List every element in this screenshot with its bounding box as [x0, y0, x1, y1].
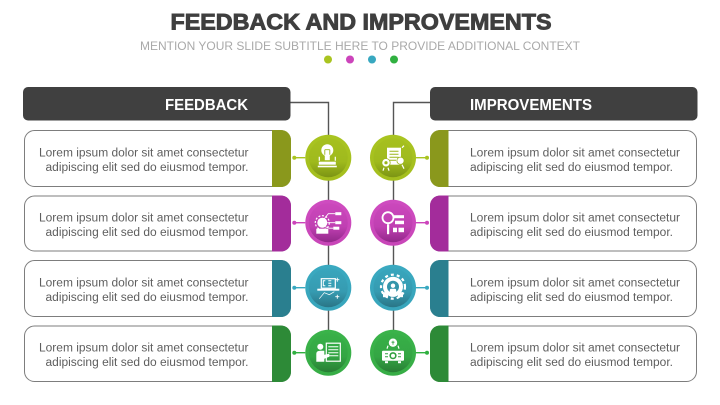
panel: feedback row 3: [24, 260, 291, 317]
subtitle: MENTION YOUR SLIDE SUBTITLE HERE TO PROVIDE ADDITIONAL CONTEXT: [140, 39, 581, 53]
panel: improvements row 1: [430, 130, 696, 187]
panel: feedback row 2: adipiscing elit sed do eiusmod tempor.: [46, 227, 248, 239]
panel: feedback row 1: adipiscing elit sed do eiusmod tempor.: [46, 162, 248, 174]
header: improvements: IMPROVEMENTS: [470, 97, 592, 114]
connector: feedback spine: [290, 102, 328, 353]
panel: improvements row 4: Lorem ipsum dolor sit amet consectetur: [470, 342, 680, 354]
node: feedback 2 gear chart: [292, 200, 351, 246]
node: improvements 3 gear team: [370, 265, 429, 311]
panel: improvements row 2: Lorem ipsum dolor sit amet consectetur: [470, 212, 680, 224]
header: feedback: [23, 87, 290, 120]
panel: feedback row 3: adipiscing elit sed do eiusmod tempor.: [46, 292, 248, 304]
panel: feedback row 2: [24, 196, 291, 252]
node: feedback 3 laptop code: [292, 265, 351, 311]
panel: feedback row 2: Lorem ipsum dolor sit amet consectetur: [39, 212, 249, 224]
panel: feedback row 1: [24, 130, 291, 187]
panel: improvements row 3: Lorem ipsum dolor sit amet consectetur: [470, 278, 680, 290]
connector: improvements spine: [394, 102, 430, 353]
panel: improvements row 3: [430, 260, 696, 317]
header: feedback: FEEDBACK: [165, 97, 249, 114]
node: improvements 4 projector: [370, 330, 429, 376]
panel: feedback row 3: Lorem ipsum dolor sit amet consectetur: [39, 278, 249, 290]
panel: feedback row 4: adipiscing elit sed do eiusmod tempor.: [46, 357, 248, 369]
panel: feedback row 1: Lorem ipsum dolor sit amet consectetur: [39, 148, 249, 160]
title: FEEDBACK AND IMPROVEMENTS: [170, 10, 552, 34]
colour dots: [324, 56, 398, 64]
panel: feedback row 4: [24, 326, 291, 382]
header: improvements: [430, 87, 698, 120]
node: feedback 4 person with clipboard: [292, 330, 351, 376]
panel: improvements row 1: Lorem ipsum dolor sit amet consectetur: [470, 148, 680, 160]
node: feedback 1 lightbulb: [292, 135, 351, 181]
panel: improvements row 2: [430, 196, 696, 252]
panel: improvements row 3: adipiscing elit sed do eiusmod tempor.: [470, 292, 673, 304]
panel: feedback row 4: Lorem ipsum dolor sit amet consectetur: [39, 342, 249, 354]
panel: improvements row 4: adipiscing elit sed do eiusmod tempor.: [470, 357, 673, 369]
panel: improvements row 1: adipiscing elit sed do eiusmod tempor.: [470, 162, 673, 174]
node: improvements 2 magnifier: [370, 200, 429, 246]
panel: improvements row 2: adipiscing elit sed do eiusmod tempor.: [470, 227, 673, 239]
panel: improvements row 4: [430, 326, 696, 382]
node: improvements 1 checklist: [370, 135, 429, 181]
